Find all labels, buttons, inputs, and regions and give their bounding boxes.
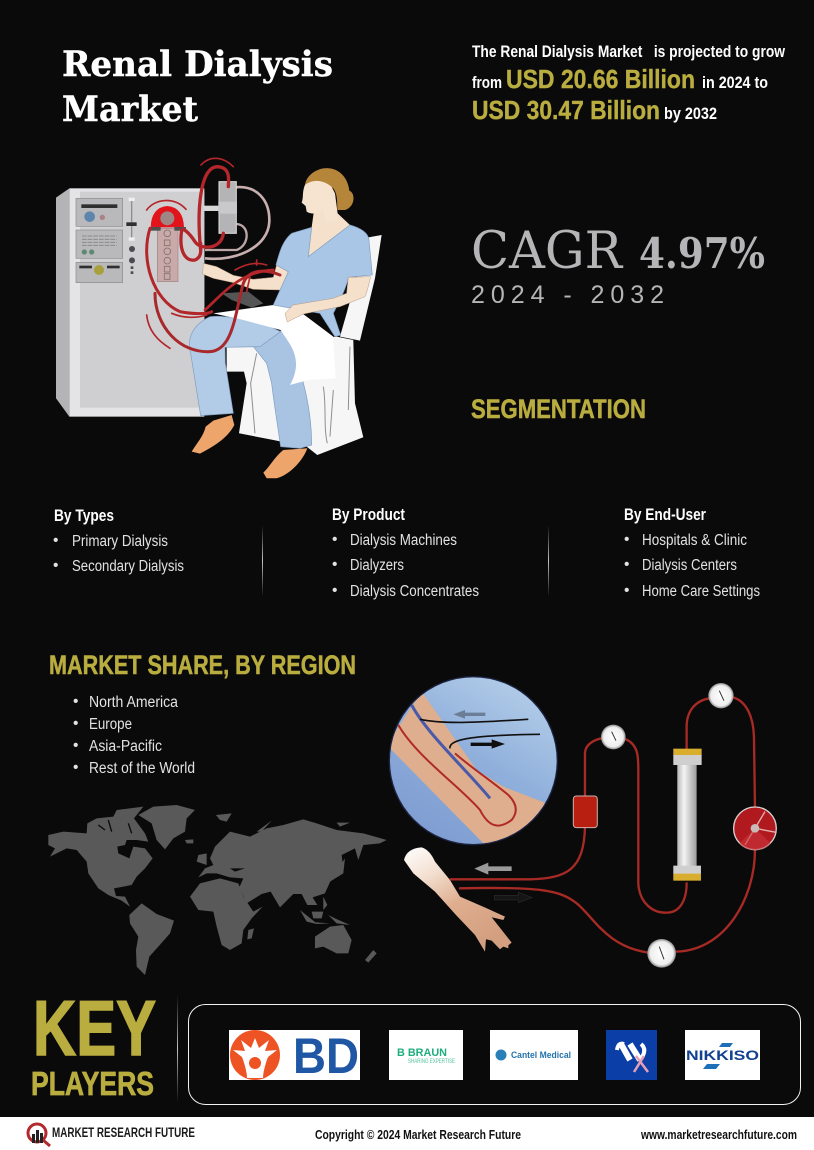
logo: B. Braun: B BRAUN xyxy=(397,1047,447,1059)
logo: B. Braun: SHARING EXPERTISE xyxy=(408,1059,455,1065)
segment list: by end-user: By End-User xyxy=(624,505,706,524)
footer bar xyxy=(0,1117,814,1150)
footer logo: MARKET RESEARCH FUTURE xyxy=(52,1125,195,1140)
world map xyxy=(48,805,387,975)
CAGR figure xyxy=(471,222,765,309)
logo: Cantel Medical: Cantel Medical xyxy=(511,1050,571,1061)
segment list: by product: By Product xyxy=(332,505,405,524)
CAGR figure: 2024 - 2032 xyxy=(471,281,664,309)
region list xyxy=(73,693,195,777)
key players divider xyxy=(177,995,178,1103)
segment list: by product: Dialysis Concentrates xyxy=(350,583,479,600)
title: Market xyxy=(62,89,198,130)
title xyxy=(62,44,333,130)
logo: Cantel Medical xyxy=(490,1030,578,1080)
segment list: by types: Secondary Dialysis xyxy=(72,558,184,575)
blood tubing loop xyxy=(451,697,755,953)
market projection text xyxy=(472,42,786,125)
region list: Europe xyxy=(89,716,132,733)
segment list: by types: Primary Dialysis xyxy=(72,533,168,550)
segment list: by end-user xyxy=(624,505,760,600)
dialysis machine cabinet xyxy=(56,188,204,417)
patient upper body xyxy=(203,168,372,337)
logo: BD xyxy=(229,1028,360,1084)
illustration: patient on dialysis machine xyxy=(56,158,382,478)
segment list: by product xyxy=(332,505,479,600)
footer logo xyxy=(28,1124,195,1146)
market projection text: USD 20.66 Billion xyxy=(506,64,695,94)
copyright: Copyright © 2024 Market Research Future xyxy=(315,1127,521,1142)
patient legs xyxy=(189,316,312,478)
flow arrows xyxy=(474,863,532,903)
segment list: by end-user: Hospitals & Clinic xyxy=(642,532,747,549)
logo: BD: BD xyxy=(293,1028,359,1084)
market projection text: from xyxy=(472,73,502,92)
blood chamber xyxy=(573,796,597,828)
dialyzer column xyxy=(673,749,702,881)
region list: North America xyxy=(89,694,178,711)
blood circulation tubes and arrows xyxy=(147,158,280,352)
segment list: by end-user: • xyxy=(624,582,629,599)
region list: • xyxy=(73,737,78,754)
key players heading: PLAYERS xyxy=(31,1065,154,1102)
segment list: by product: • xyxy=(332,582,337,599)
region list: Asia-Pacific xyxy=(89,738,162,755)
segment divider two xyxy=(548,525,549,597)
key players heading xyxy=(31,984,156,1102)
segment list: by product: • xyxy=(332,531,337,548)
pressure gauges xyxy=(601,683,734,968)
segment list: by types xyxy=(53,506,184,575)
region list: Rest of the World xyxy=(89,760,195,777)
towel on lap xyxy=(213,305,336,385)
lower arm xyxy=(404,847,512,952)
segment list: by types: • xyxy=(53,557,58,574)
dialysis circuit illustration xyxy=(387,677,776,968)
white cloth chair and pillow xyxy=(227,235,382,455)
market share heading: MARKET SHARE, BY REGION xyxy=(49,650,356,680)
segmentation heading: SEGMENTATION xyxy=(471,394,646,424)
magnified forearm circle xyxy=(387,677,557,847)
market projection text: USD 30.47 Billion xyxy=(472,95,660,125)
title: Renal Dialysis xyxy=(62,44,333,85)
market projection text: in 2024 to xyxy=(702,73,768,92)
CAGR figure: 4.97% xyxy=(639,229,765,278)
CAGR figure: CAGR xyxy=(471,222,624,281)
market projection text: by 2032 xyxy=(664,104,717,123)
segment list: by product: • xyxy=(332,556,337,573)
key players heading: KEY xyxy=(33,984,156,1072)
region list: • xyxy=(73,693,78,710)
logo: B. Braun xyxy=(389,1030,463,1080)
logo: Nikkiso: NIKKISO xyxy=(686,1048,759,1063)
blood pump xyxy=(734,807,776,850)
segment list: by end-user: Dialysis Centers xyxy=(642,557,737,574)
segment list: by types: By Types xyxy=(54,506,114,525)
segment divider one xyxy=(262,525,263,597)
key players panel xyxy=(188,1004,800,1104)
region list: • xyxy=(73,715,78,732)
logo: blue ribbon mark xyxy=(606,1030,657,1080)
region list: • xyxy=(73,759,78,776)
segment list: by end-user: • xyxy=(624,531,629,548)
segment list: by product: Dialyzers xyxy=(350,557,404,574)
segment list: by product: Dialysis Machines xyxy=(350,532,457,549)
segment list: by end-user: Home Care Settings xyxy=(642,583,760,600)
segment list: by end-user: • xyxy=(624,556,629,573)
patient grey tubes and dialyzer xyxy=(203,182,269,259)
segment list: by types: • xyxy=(53,532,58,549)
logo: Nikkiso xyxy=(685,1030,760,1080)
